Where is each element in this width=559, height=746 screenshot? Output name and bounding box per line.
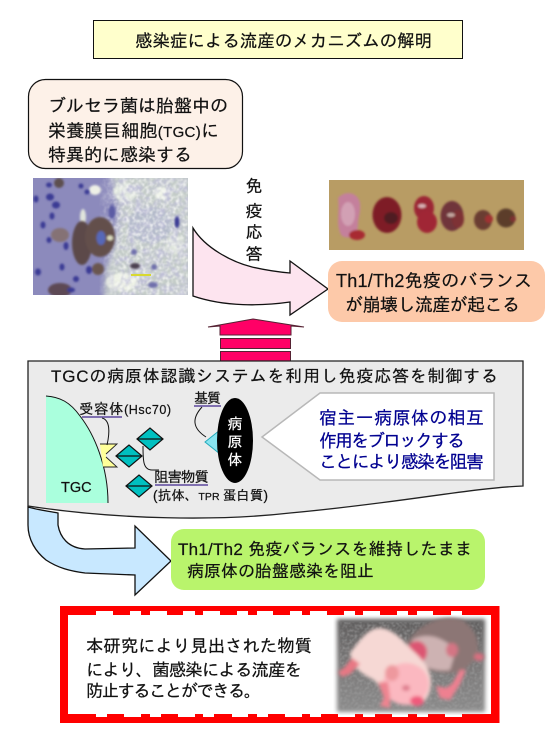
inhibitor diamonds xyxy=(116,428,163,497)
arrow: blue to green result xyxy=(28,507,171,595)
arrow: immune response to breakdown xyxy=(193,228,328,315)
title: 感染症による流産のメカニズムの解明 xyxy=(135,31,432,51)
pathogen: 病 xyxy=(228,416,242,433)
callout: prevent placental infection xyxy=(171,529,485,590)
pathogen: 体 xyxy=(228,452,242,469)
label: inhibitors: 阻害物質 xyxy=(154,469,209,486)
label: immune response (vertical): 免 xyxy=(246,177,262,196)
callout: Brucella infection: ブルセラ菌は胎盤中の xyxy=(48,96,228,116)
label: substrate: 基質 xyxy=(194,390,221,406)
callout: prevent placental infection: 病原体の胎盤感染を阻止 xyxy=(187,562,374,581)
callout: Th1/Th2 balance collapse: Th1/Th2免疫のバランス xyxy=(336,271,532,291)
panel: conclusion xyxy=(60,606,500,723)
label: receptor xyxy=(79,401,171,445)
receptor xyxy=(100,444,117,467)
arrow: upward red xyxy=(208,319,304,362)
callout: blocking interaction xyxy=(262,393,494,480)
panel: pathogen recognition control xyxy=(28,361,523,518)
label: immune response (vertical): 疫 xyxy=(246,202,262,221)
TGC cell: TGC xyxy=(61,480,92,496)
callout: Th1/Th2 balance collapse xyxy=(328,261,545,322)
callout: blocking interaction: ことにより感染を阻害 xyxy=(319,452,484,472)
conclusion text: 本研究により見出された物質 xyxy=(86,636,312,656)
photo: healthy newborn pups xyxy=(337,618,485,712)
photo: micrograph of infected TGC xyxy=(33,178,188,295)
pathogen xyxy=(217,398,253,483)
callout: Brucella infection xyxy=(28,80,242,168)
substrate diamond xyxy=(205,430,220,454)
label: inhibitors: (抗体、TPR 蛋白質) xyxy=(153,488,268,503)
photo: aborted fetuses xyxy=(329,180,524,250)
TGC cell xyxy=(46,396,108,503)
label: substrate xyxy=(194,390,221,437)
callout: Th1/Th2 balance collapse: が崩壊し流産が起こる xyxy=(345,295,520,315)
heading: TGC control: TGCの病原体認識システムを利用し免疫応答を制御する xyxy=(51,367,498,386)
conclusion text: 防止することができる。 xyxy=(86,681,261,701)
callout: blocking interaction: 宿主ー病原体の相互 xyxy=(319,408,484,428)
label: immune response (vertical): 応 xyxy=(246,223,262,242)
label: immune response (vertical) xyxy=(246,177,262,264)
label: inhibitors xyxy=(143,446,268,503)
conclusion text xyxy=(86,636,312,701)
callout: Brucella infection: 栄養膜巨細胞(TGC)に xyxy=(48,121,219,141)
callout: Brucella infection: 特異的に感染する xyxy=(48,145,192,165)
pathogen: 原 xyxy=(228,434,242,451)
label: immune response (vertical): 答 xyxy=(246,245,262,264)
title xyxy=(94,20,462,58)
conclusion text: により、菌感染による流産を xyxy=(86,660,302,680)
callout: blocking interaction: 作用をブロックする xyxy=(319,431,465,451)
callout: prevent placental infection: Th1/Th2 免疫バランスを維持したまま xyxy=(178,540,472,559)
label: receptor: 受容体(Hsc70) xyxy=(79,401,171,418)
